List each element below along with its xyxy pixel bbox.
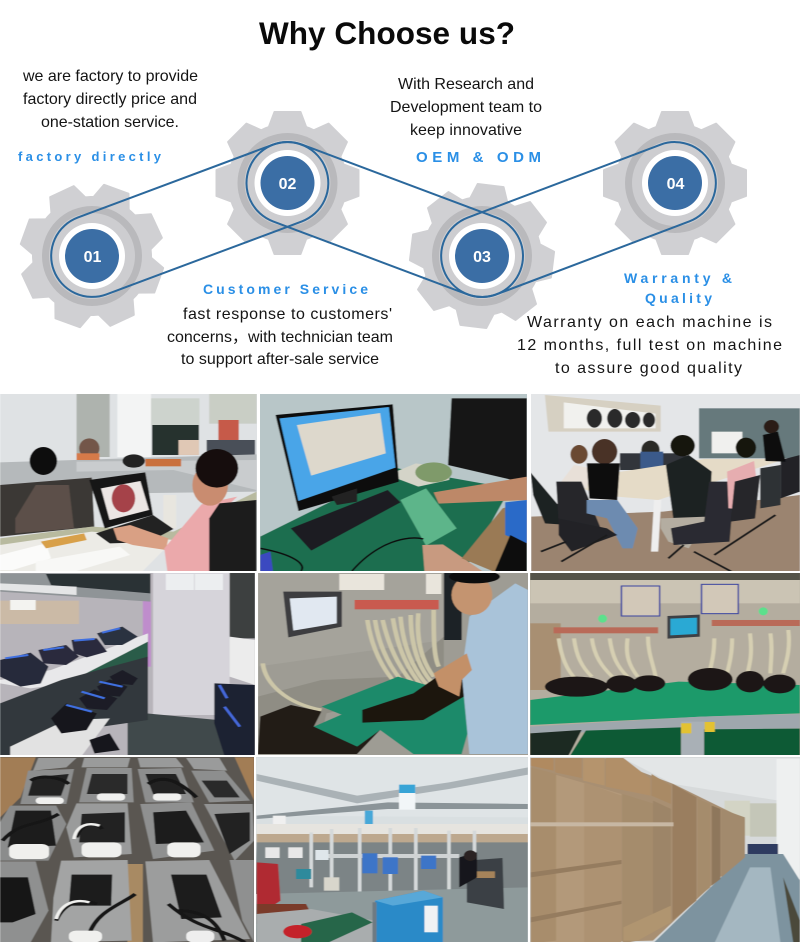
- text block: factory directly: factory directly price and: [23, 91, 197, 108]
- photo: warehouse pallets: [530, 757, 800, 942]
- photo: technician testing leg cuff: [258, 573, 528, 755]
- gear numbers: [84, 176, 684, 266]
- gear 01: [1, 165, 183, 347]
- text block: warranty and quality: to assure good quality: [555, 360, 742, 377]
- text block: warranty and quality: Quality: [645, 290, 712, 306]
- text block: customer service: [167, 281, 393, 368]
- text block: OEM and ODM: With Research and: [398, 76, 534, 93]
- photo: monitor and circuit board: [260, 394, 527, 571]
- photo: production line: [256, 757, 528, 942]
- text block: factory directly: one-station service.: [41, 114, 179, 131]
- text block: customer service: concerns，with technician team: [167, 329, 393, 346]
- text block: customer service: Customer Service: [203, 281, 368, 297]
- text block: factory directly: [18, 68, 198, 164]
- gear 04: [604, 112, 746, 254]
- text block: factory directly: we are factory to provide: [22, 68, 198, 85]
- text block: OEM and ODM: keep innovative: [410, 122, 522, 139]
- gear 03: [403, 177, 561, 335]
- text block: warranty and quality: Warranty on each machine is: [527, 314, 772, 331]
- photo: test bench with leg cuffs: [530, 573, 800, 755]
- text block: customer service: to support after-sale service: [181, 351, 379, 368]
- gear 02: [216, 112, 358, 254]
- photo: devices in assembly trays: [0, 757, 254, 942]
- text block: warranty and quality: Warranty &: [624, 270, 732, 286]
- photo: meeting room: [531, 394, 800, 571]
- text block: OEM and ODM: [390, 76, 542, 166]
- photo: design office: [0, 394, 257, 571]
- text block: factory directly: factory directly: [18, 149, 162, 164]
- text block: warranty and quality: 12 months, full test on machine: [517, 337, 782, 354]
- text block: OEM and ODM: Development team to: [390, 99, 542, 116]
- belts linking gears: [51, 142, 716, 297]
- text block: customer service: fast response to customers': [183, 306, 392, 323]
- title: Why Choose us?: [259, 15, 515, 51]
- photo: machine storage shelves: [0, 573, 255, 755]
- gear diagram: [1, 112, 746, 347]
- text block: warranty and quality: [517, 270, 782, 377]
- gear numbers: 04: [667, 176, 684, 193]
- gear numbers: 03: [473, 249, 491, 266]
- text block: OEM and ODM: OEM & ODM: [416, 149, 541, 166]
- gear numbers: 01: [84, 249, 102, 266]
- gear numbers: 02: [279, 176, 296, 193]
